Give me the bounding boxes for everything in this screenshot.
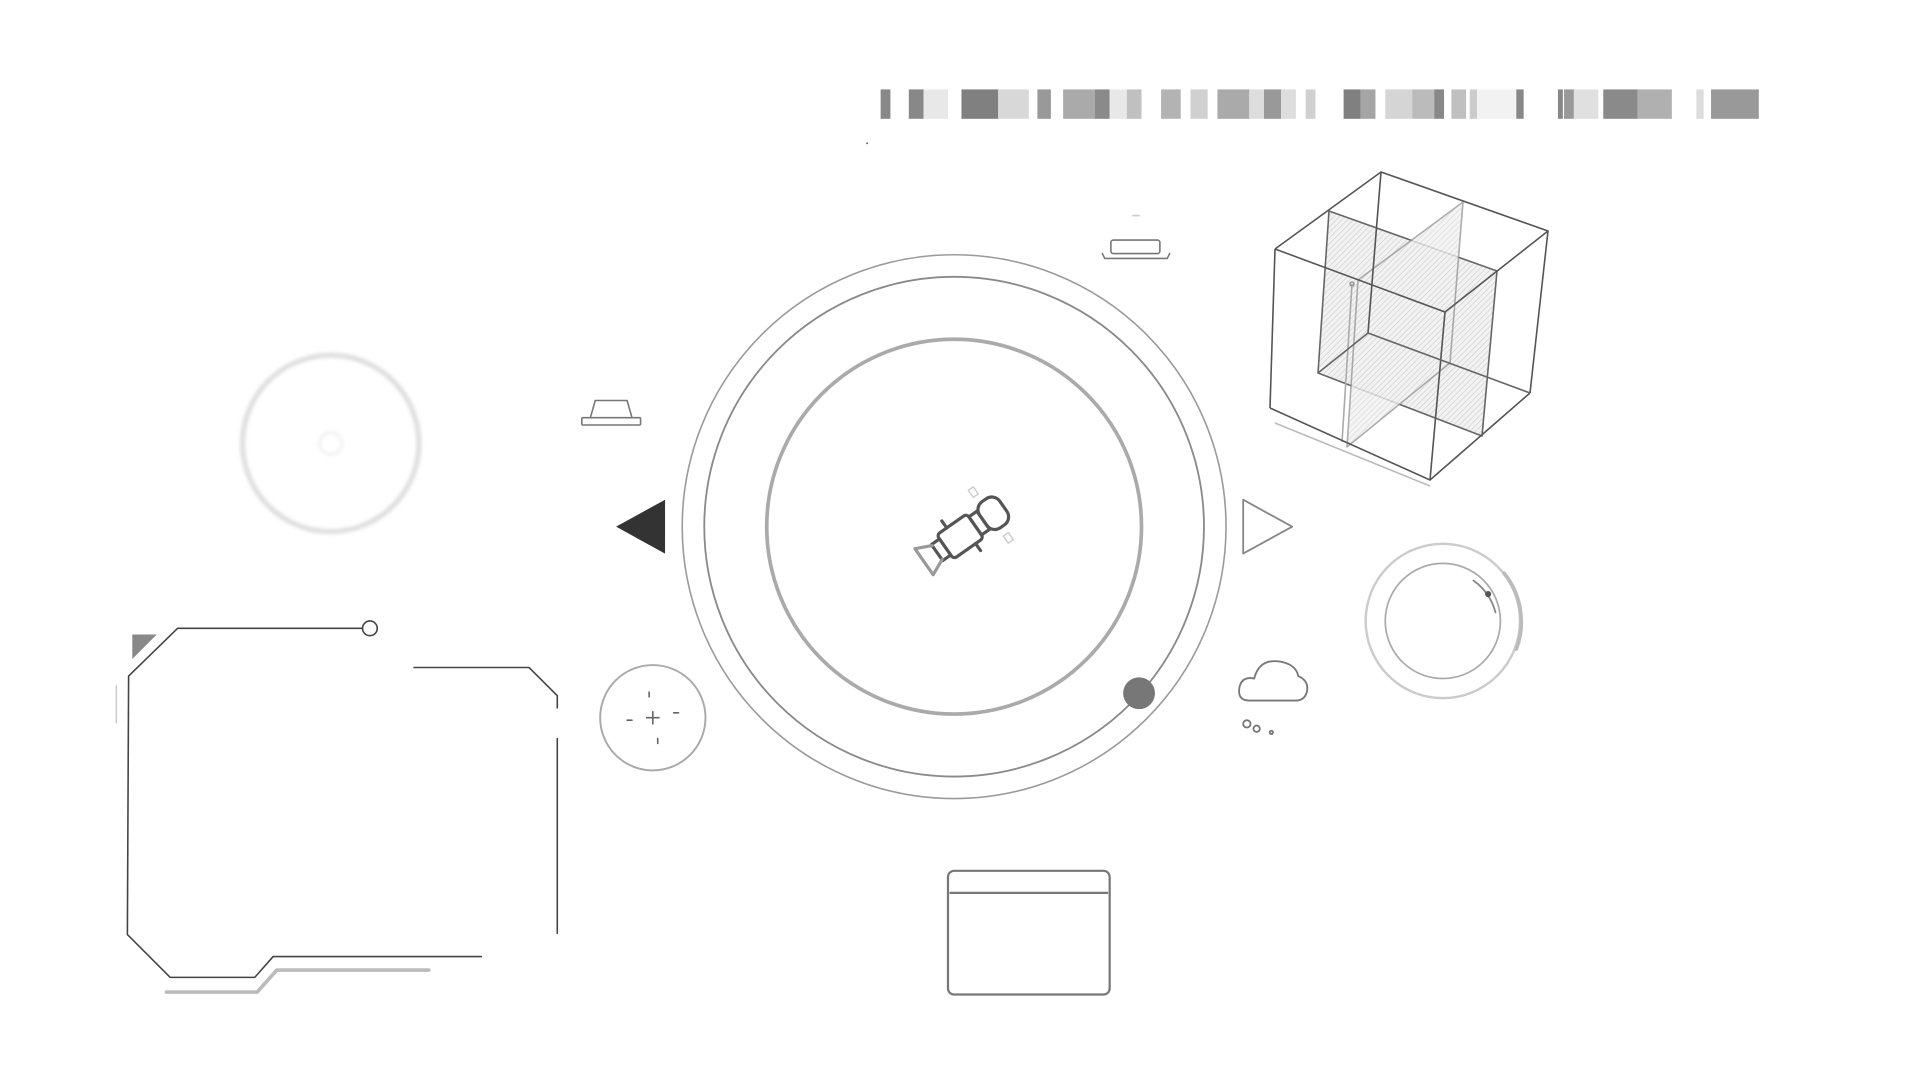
icon: cloud <box>1239 661 1307 734</box>
barcode strip <box>881 89 1759 119</box>
arrow: right outline triangle <box>1243 500 1292 554</box>
gauge circle right <box>1366 544 1521 698</box>
window box <box>948 871 1110 995</box>
arrow: left filled triangle <box>616 500 665 554</box>
main ring outer <box>682 255 1226 799</box>
faint circle left <box>243 355 419 532</box>
main ring inner <box>767 339 1142 714</box>
frame panel bottom-left <box>116 142 868 992</box>
icon: satellite <box>905 479 1022 589</box>
progress dot <box>1123 677 1155 709</box>
cube wireframe <box>1270 172 1548 486</box>
crosshair circle <box>600 665 705 770</box>
icon: small trapezoid left <box>582 401 641 425</box>
icon: small tray top <box>1102 216 1170 258</box>
main ring middle <box>704 277 1204 777</box>
